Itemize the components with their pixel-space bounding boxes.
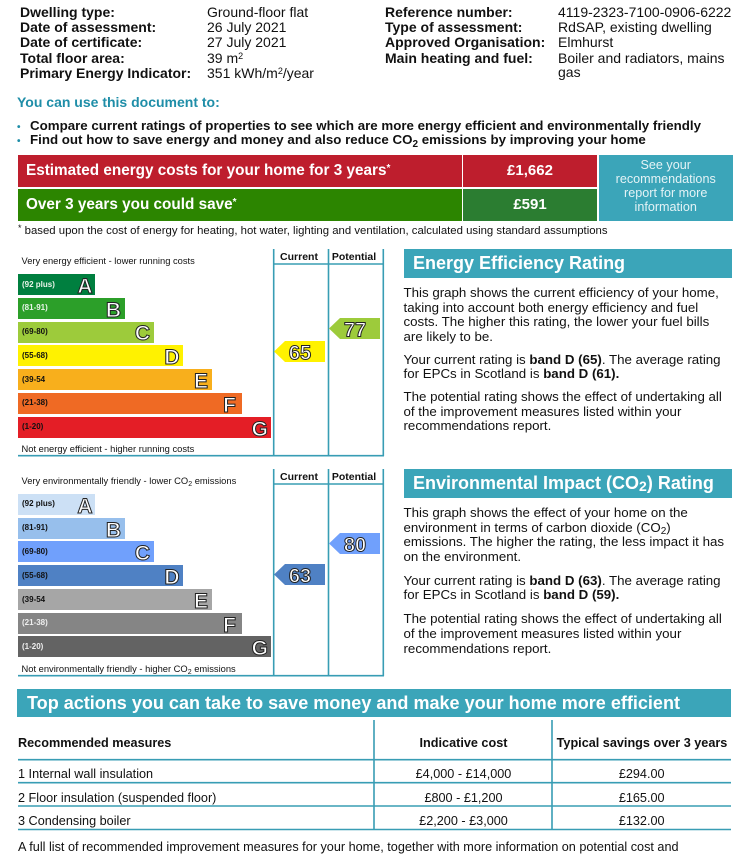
environmental impact description: emissions. The higher the rating, the less impact it has	[404, 534, 724, 549]
row 3	[18, 814, 665, 828]
band D: (55-68)	[22, 571, 48, 580]
chart: energy efficiency rating	[18, 249, 384, 456]
potential rating arrow 80: 80	[344, 534, 366, 556]
bullet list: Compare current ratings of properties to see which are more energy efficient and environmentally friendly	[30, 118, 702, 133]
recommendations callout	[599, 155, 733, 221]
footnote: based upon the cost of energy for heating, hot water, lighting and ventilation, calculated using standard assumptions	[22, 225, 608, 237]
details right column: Reference number:	[385, 4, 513, 20]
table: recommended measures	[18, 720, 731, 830]
band G: (1-20)	[22, 642, 44, 651]
current rating arrow 65	[274, 341, 325, 364]
band D	[18, 565, 183, 589]
row 2: £165.00	[619, 791, 665, 805]
current rating arrow 65: 65	[289, 342, 311, 364]
potential rating arrow 77: 77	[344, 320, 366, 342]
heading: energy efficiency rating: Energy Efficiency Rating	[413, 253, 625, 273]
band E: E	[194, 370, 208, 393]
heading: top actions banner	[17, 689, 731, 717]
band F	[18, 613, 242, 637]
band A: A	[77, 275, 92, 298]
heading: energy efficiency rating	[404, 249, 732, 278]
details right column	[385, 4, 732, 80]
row 3: £132.00	[619, 814, 665, 828]
energy efficiency description: Your current rating is band D (65). The average rating	[404, 352, 721, 367]
details right column: Main heating and fuel:	[385, 50, 533, 66]
table header: Indicative cost	[420, 736, 508, 750]
details left column: 351 kWh/m	[207, 65, 278, 81]
band G: (1-20)	[22, 422, 44, 431]
environmental impact description: of the improvement measures listed within your	[404, 626, 682, 641]
chart: environmental impact rating: Not environmentally friendly - higher CO	[22, 664, 188, 674]
band E	[18, 589, 212, 613]
row 3: £2,200 - £3,000	[419, 814, 508, 828]
details left column: Primary Energy Indicator:	[20, 65, 191, 81]
environmental impact description: on the environment.	[404, 549, 521, 564]
band G	[18, 417, 271, 441]
bullet list: •	[17, 136, 21, 147]
recommendations callout: information	[635, 200, 697, 214]
band G: G	[252, 637, 268, 660]
band A	[18, 494, 95, 518]
estimated costs row: Estimated energy costs for your home for 3 years	[26, 162, 386, 179]
row 1: £4,000 - £14,000	[416, 767, 511, 781]
band B	[18, 518, 125, 542]
details left column: Date of assessment:	[20, 19, 156, 35]
bullet list	[17, 118, 702, 150]
energy efficiency description: costs. The higher this rating, the lower your fuel bills	[404, 314, 710, 329]
energy efficiency description: This graph shows the current efficiency of your home,	[404, 285, 719, 300]
chart: environmental impact rating: emissions	[192, 664, 236, 674]
details right column: gas	[558, 64, 581, 80]
band C: C	[135, 322, 150, 345]
band A: (92 plus)	[22, 280, 55, 289]
details right column: Approved Organisation:	[385, 34, 545, 50]
energy efficiency description: of the improvement measures listed within your	[404, 404, 682, 419]
details left column: Ground-floor flat	[207, 4, 308, 20]
heading: environmental impact rating	[404, 469, 732, 498]
details right column: Elmhurst	[558, 34, 613, 50]
heading: environmental impact rating: Environmental Impact (CO	[413, 473, 639, 493]
details left column: 27 July 2021	[207, 34, 287, 50]
band B: B	[106, 519, 121, 542]
savings row	[18, 189, 597, 221]
table header	[18, 736, 727, 750]
band E	[18, 369, 212, 393]
band D: (55-68)	[22, 351, 48, 360]
row 1: 1 Internal wall insulation	[18, 767, 153, 781]
current rating arrow 63	[274, 564, 325, 588]
environmental impact description	[404, 505, 724, 656]
details right column: Boiler and radiators, mains	[558, 50, 725, 66]
heading: environmental impact rating: 2	[639, 478, 647, 494]
potential rating arrow 80	[329, 533, 380, 556]
environmental impact description: The potential rating shows the effect of undertaking all	[404, 611, 722, 626]
savings row: £591	[513, 196, 547, 213]
recommendations callout: report for more	[624, 186, 707, 200]
panel: environmental impact text	[404, 469, 732, 656]
details left column	[20, 4, 314, 81]
environmental impact description: Your current rating is band D (63). The average rating	[404, 573, 721, 588]
details left column: 2	[278, 66, 283, 76]
panel: energy efficiency text	[404, 249, 732, 433]
band D	[18, 345, 183, 369]
details left column: Date of certificate:	[20, 34, 142, 50]
bullet list: 2	[412, 139, 418, 150]
details right column: 4119-2323-7100-0906-6222	[558, 4, 732, 20]
row 1	[18, 767, 665, 781]
chart: energy efficiency rating: Potential	[332, 251, 376, 263]
energy efficiency description: recommendations report.	[404, 418, 551, 433]
row 3: 3 Condensing boiler	[18, 814, 131, 828]
savings row: *	[233, 197, 237, 208]
band F	[18, 393, 242, 417]
band C: (69-80)	[22, 547, 48, 556]
table header: Typical savings over 3 years	[557, 736, 727, 750]
footnote: *	[18, 223, 22, 233]
cost summary panel	[18, 155, 733, 221]
band D: D	[164, 566, 180, 589]
energy efficiency description: are likely to be.	[404, 329, 493, 344]
heading: environmental impact rating: ) Rating	[647, 473, 714, 493]
estimated costs row: *	[386, 163, 390, 174]
band C: C	[135, 542, 150, 565]
energy efficiency description: for EPCs in Scotland is band D (61).	[404, 366, 619, 381]
row 1: £294.00	[619, 767, 665, 781]
band E: (39-54	[22, 595, 46, 604]
band F: (21-38)	[22, 618, 48, 627]
band E: E	[194, 590, 208, 613]
details left column: 26 July 2021	[207, 19, 287, 35]
band F: (21-38)	[22, 398, 48, 407]
chart: environmental impact rating: Very environmentally friendly - lower CO	[22, 476, 188, 486]
band D: D	[164, 346, 180, 369]
energy efficiency description: The potential rating shows the effect of undertaking all	[404, 389, 722, 404]
environmental impact description: for EPCs in Scotland is band D (59).	[404, 587, 619, 602]
band F: F	[223, 614, 236, 637]
band C	[18, 541, 154, 565]
band E: (39-54	[22, 375, 46, 384]
chart: environmental impact rating: 2	[188, 669, 192, 676]
band B: (81-91)	[22, 303, 48, 312]
details right column: Type of assessment:	[385, 19, 522, 35]
band G	[18, 636, 271, 660]
energy efficiency description	[404, 285, 722, 433]
environmental impact description: recommendations report.	[404, 641, 551, 656]
savings row: Over 3 years you could save	[26, 196, 233, 213]
chart: environmental impact rating: Potential	[332, 471, 376, 483]
estimated costs row: £1,662	[507, 162, 553, 179]
bullet list: Find out how to save energy and money and also reduce CO	[30, 132, 412, 147]
details left column: 39 m	[207, 50, 238, 66]
band B: (81-91)	[22, 523, 48, 532]
details left column: Total floor area:	[20, 50, 125, 66]
band A: A	[77, 495, 92, 518]
environmental impact description: 2	[661, 526, 667, 537]
energy efficiency description: taking into account both energy efficiency and fuel	[404, 300, 698, 315]
chart: environmental impact rating: 2	[188, 481, 192, 488]
details left column: Dwelling type:	[20, 4, 115, 20]
heading: you can use this document: You can use this document to:	[17, 94, 220, 110]
environmental impact description: )	[666, 520, 671, 535]
band A: (92 plus)	[22, 499, 55, 508]
chart: environmental impact rating: emissions	[192, 476, 237, 486]
chart: environmental impact rating: Current	[280, 471, 318, 483]
chart: environmental impact rating	[18, 469, 384, 676]
property details	[20, 4, 732, 81]
band G: G	[252, 418, 268, 441]
bullet list: •	[17, 122, 21, 133]
band F: F	[223, 394, 236, 417]
current rating arrow 63: 63	[289, 566, 311, 588]
details left column: /year	[283, 65, 314, 81]
heading: top actions banner: Top actions you can take to save money and make your home more efficient	[27, 693, 680, 713]
chart: energy efficiency rating: Very energy efficient - lower running costs	[22, 256, 195, 266]
chart: energy efficiency rating: Current	[280, 251, 318, 263]
details right column: RdSAP, existing dwelling	[558, 19, 712, 35]
band B	[18, 298, 125, 322]
environmental impact description: This graph shows the effect of your home on the	[404, 505, 688, 520]
row 2	[18, 791, 665, 805]
details left column: 2	[238, 51, 243, 61]
estimated costs row	[18, 155, 597, 187]
row 2: 2 Floor insulation (suspended floor)	[18, 791, 216, 805]
recommendations callout: recommendations	[616, 172, 716, 186]
band C: (69-80)	[22, 327, 48, 336]
band A	[18, 274, 95, 298]
potential rating arrow 77	[329, 318, 380, 342]
bullet list: emissions by improving your home	[418, 132, 646, 147]
environmental impact description: environment in terms of carbon dioxide (CO	[404, 520, 661, 535]
closing note: A full list of recommended improvement measures for your home, together with more information on potential cost and	[18, 840, 679, 854]
recommendations callout: See your	[640, 158, 691, 172]
table header: Recommended measures	[18, 736, 171, 750]
row 2: £800 - £1,200	[424, 791, 503, 805]
band B: B	[106, 299, 121, 322]
chart: energy efficiency rating: Not energy efficient - higher running costs	[22, 444, 195, 454]
band C	[18, 322, 154, 345]
